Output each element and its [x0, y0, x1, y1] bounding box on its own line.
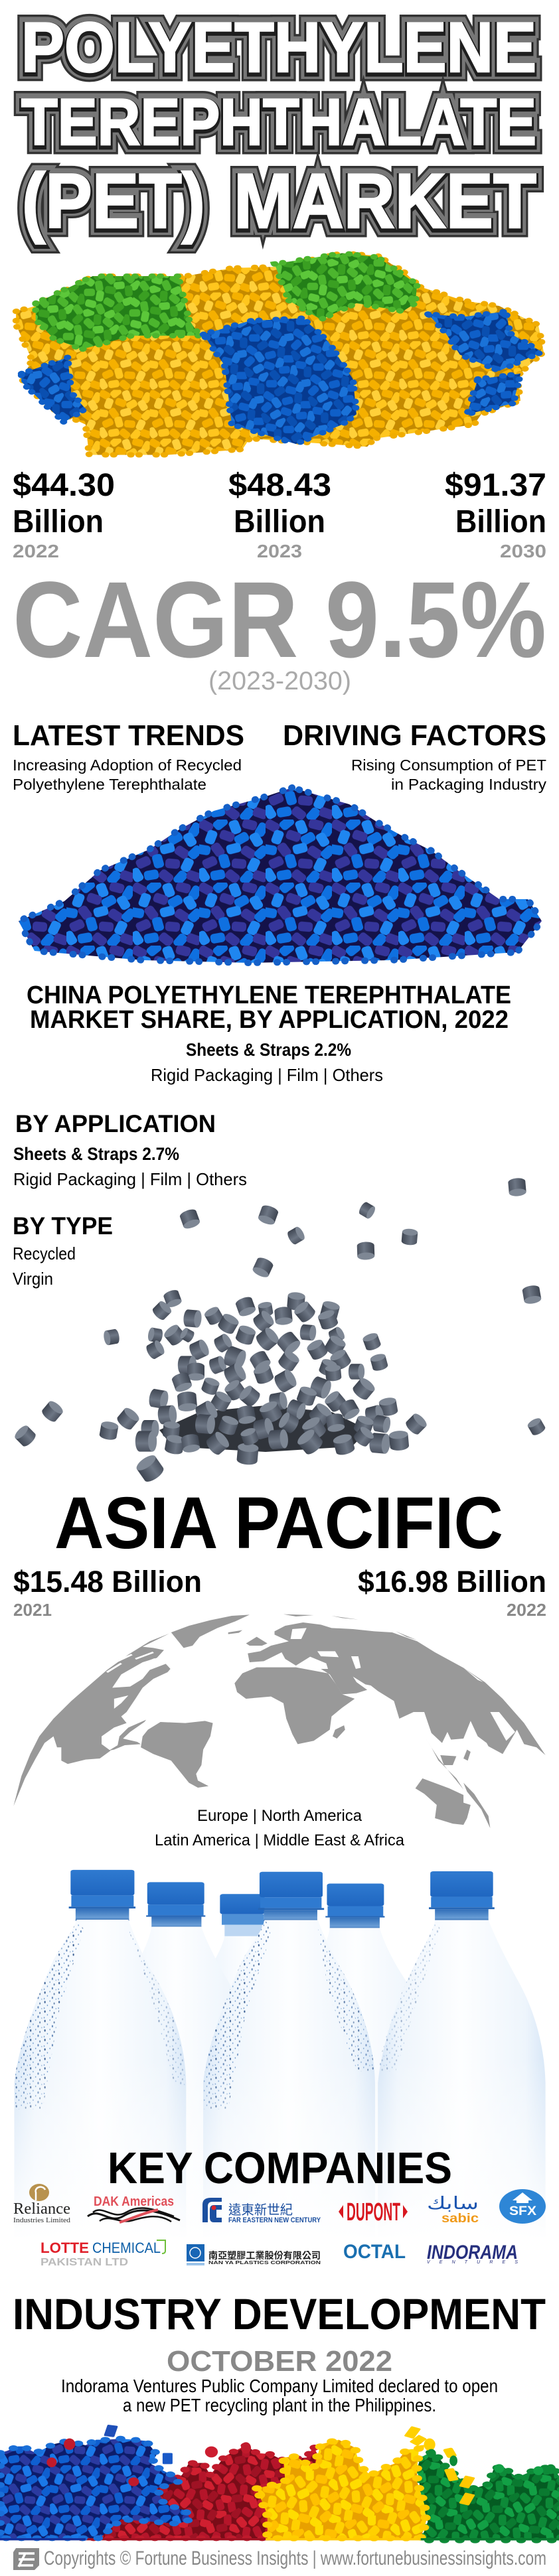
logo: Indorama Ventures: VENTURES — [427, 2260, 518, 2265]
by type: Recycled — [13, 1244, 76, 1263]
title line 3: MARKET — [234, 157, 536, 244]
Key Companies heading: KEY COMPANIES — [108, 2143, 452, 2193]
logo: DAK Americas: DAK Americas — [94, 2194, 174, 2209]
footer logo — [13, 2548, 39, 2570]
driving factors: DRIVING FACTORS — [283, 719, 546, 752]
Asia Pacific 2021 value: $15.48 Billion — [13, 1565, 202, 1599]
back bottle — [200, 1894, 292, 2119]
logo: Lotte Chemical Pakistan — [40, 2240, 165, 2268]
market value 2023: 2023 — [257, 541, 302, 561]
logo: Far Eastern New Century — [202, 2198, 321, 2224]
bottle 6 — [378, 1871, 546, 2237]
logo: SABIC — [427, 2194, 479, 2226]
China share: other segments: Rigid Packaging | Film | Others — [151, 1065, 383, 1085]
title line 3: (PET) — [22, 157, 205, 244]
logo: Reliance — [13, 2184, 70, 2224]
Asia Pacific 2022 value: 2022 — [507, 1600, 546, 1620]
China market share heading: MARKET SHARE, BY APPLICATION, 2022 — [30, 1006, 509, 1034]
latest trends: LATEST TRENDS — [13, 719, 244, 752]
by application: Rigid Packaging | Film | Others — [13, 1169, 247, 1189]
driving factors — [283, 719, 547, 793]
logo: Indorama Ventures: INDORAMA — [427, 2242, 518, 2263]
hero image: coloured pellets — [16, 253, 544, 455]
logo: Lotte Chemical Pakistan: CHEMICAL — [92, 2240, 161, 2256]
China market share heading: CHINA POLYETHYLENE TEREPHTHALATE — [27, 981, 511, 1009]
logo: Nan Ya Plastics: NAN YA PLASTICS CORPORATION — [208, 2261, 321, 2265]
by application: BY APPLICATION — [15, 1110, 216, 1137]
logo: SABIC: sabic — [441, 2212, 479, 2226]
image: grey pellets falling — [13, 1177, 546, 1484]
red pellets — [82, 2445, 321, 2538]
logo: DuPont — [339, 2198, 408, 2226]
market value 2023: $48.43 — [228, 468, 331, 503]
title — [21, 7, 536, 246]
market value 2023: Billion — [234, 504, 325, 539]
Asia Pacific 2021 value — [13, 1565, 202, 1620]
latest trends: Increasing Adoption of Recycled — [13, 756, 242, 774]
by application: Sheets & Straps 2.7% — [13, 1144, 179, 1164]
logo: SFX: SFX — [509, 2204, 536, 2218]
market value 2030: Billion — [455, 504, 546, 539]
logo: Far Eastern New Century: FAR EASTERN NEW CENTURY — [228, 2216, 321, 2224]
title line 3 — [22, 157, 536, 246]
by application — [13, 1110, 247, 1189]
by type: BY TYPE — [13, 1212, 113, 1240]
by type — [13, 1212, 113, 1289]
yellow pellets — [257, 2440, 426, 2538]
bottle 1 — [14, 1870, 186, 2237]
Asia Pacific heading: ASIA PACIFIC — [54, 1482, 503, 1564]
market value 2022: 2022 — [13, 541, 59, 561]
logo: DAK Americas — [88, 2194, 180, 2222]
China share: sheets and straps: Sheets & Straps 2.2% — [186, 1040, 351, 1060]
logo: Lotte Chemical Pakistan: PAKISTAN LTD — [40, 2257, 128, 2268]
market value 2022 — [13, 468, 115, 561]
loose pellets — [46, 2425, 556, 2506]
title line 3: (PET) — [22, 158, 205, 245]
world map globe — [13, 1614, 546, 1828]
development text: Indorama Ventures Public Company Limited declared to open — [61, 2376, 498, 2396]
bottle 5 — [278, 1884, 433, 2237]
title line 3: (PET) — [22, 158, 205, 245]
logo: Reliance: Industries Limited — [13, 2217, 70, 2224]
market value 2023 — [228, 468, 331, 561]
green pellets — [417, 2451, 559, 2540]
logo: Far Eastern New Century: 遠東新世紀 — [228, 2199, 293, 2218]
date: OCTOBER 2022 — [167, 2345, 392, 2378]
China market share heading — [27, 981, 511, 1034]
Asia Pacific 2022 value — [358, 1565, 546, 1620]
development text — [61, 2376, 498, 2415]
white seas and lakes — [107, 1628, 515, 1741]
logo: Nan Ya Plastics — [187, 2244, 321, 2265]
market value 2030 — [445, 468, 546, 561]
bottle fade to white — [0, 2057, 559, 2240]
title line 3: MARKET — [234, 158, 536, 245]
other regions line 1: Europe | North America — [197, 1807, 362, 1825]
logo: DuPont: DUPONT — [347, 2198, 400, 2226]
logo: Reliance: Reliance — [13, 2200, 70, 2218]
bottle 2 — [100, 1882, 252, 2237]
blue pellets — [0, 2439, 191, 2538]
market value 2022: Billion — [13, 504, 104, 539]
market value 2030: $91.37 — [445, 468, 546, 503]
title line 3: MARKET — [234, 159, 536, 246]
market value 2030: 2030 — [500, 541, 546, 561]
market value 2022: $44.30 — [13, 468, 115, 503]
driving factors: in Packaging Industry — [391, 776, 547, 793]
latest trends — [13, 719, 244, 793]
logo: SFX — [499, 2189, 546, 2224]
Asia Pacific 2022 value: $16.98 Billion — [358, 1565, 546, 1599]
logo: Lotte Chemical Pakistan: LOTTE — [40, 2240, 89, 2256]
logo: Octal: OCTAL — [343, 2241, 406, 2263]
title line 3: (PET) — [22, 159, 205, 246]
latest trends: Polyethylene Terephthalate — [13, 776, 206, 793]
Asia Pacific 2021 value: 2021 — [13, 1600, 52, 1620]
driving factors: Rising Consumption of PET — [351, 756, 546, 774]
image: water bottles — [0, 1870, 559, 2240]
logo: SABIC: سابك — [427, 2194, 479, 2214]
by type: Virgin — [13, 1269, 53, 1289]
image: blue pellet pile — [19, 788, 542, 963]
title line 3: MARKET — [234, 158, 536, 245]
bottle 4 — [203, 1872, 375, 2237]
CAGR period: (2023-2030) — [208, 667, 351, 695]
development text: a new PET recycling plant in the Philippines. — [123, 2395, 436, 2415]
other regions line 2: Latin America | Middle East & Africa — [155, 1831, 405, 1849]
logo: Nan Ya Plastics: 南亞塑膠工業股份有限公司 — [208, 2249, 321, 2262]
image: coloured pellet band — [0, 2425, 559, 2540]
